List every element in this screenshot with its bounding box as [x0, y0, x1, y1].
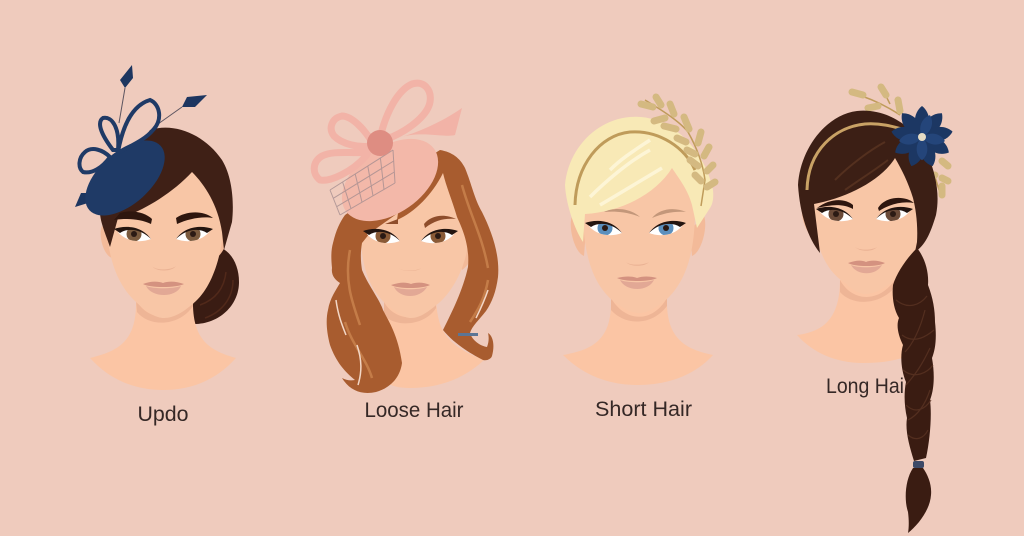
eyes loose — [363, 228, 458, 244]
lips updo — [143, 282, 184, 295]
ribbon tail loose — [398, 108, 462, 138]
hat disc loose — [327, 122, 453, 238]
brows updo — [114, 211, 213, 224]
neck and shoulders long — [797, 280, 930, 363]
label: short hair: Short Hair — [595, 398, 692, 421]
blue clip loose — [458, 333, 478, 336]
face long — [813, 147, 924, 294]
face short — [583, 160, 695, 313]
gold headband long — [807, 124, 905, 190]
neck shadow long — [840, 278, 896, 302]
ears updo — [101, 226, 227, 258]
nose updo — [152, 266, 176, 270]
hair updo — [100, 128, 233, 250]
hair highlights loose — [345, 178, 488, 378]
brows loose — [385, 216, 456, 228]
gold leaves long — [852, 86, 948, 195]
nose short — [626, 262, 649, 266]
pink fascinator loose — [314, 83, 462, 238]
figure: loose hair — [314, 83, 498, 393]
navy flower long — [890, 106, 954, 169]
loops updo — [79, 100, 159, 172]
neck and shoulders loose — [375, 300, 484, 388]
lips loose — [391, 283, 430, 296]
face loose — [361, 170, 469, 318]
figure: long hair — [797, 86, 954, 533]
hair long — [798, 111, 938, 253]
hair short — [565, 117, 713, 242]
braid strands long — [896, 296, 934, 439]
hair streaks short — [590, 140, 662, 205]
hat disc updo — [72, 127, 178, 229]
face updo — [106, 165, 224, 318]
figure: short hair — [563, 97, 715, 385]
label: long hair: Long Hai — [826, 375, 904, 398]
braid tail long — [906, 468, 931, 533]
nose loose — [399, 268, 421, 271]
eyes long — [816, 206, 913, 222]
label: updo: Updo — [138, 403, 188, 426]
lips short — [617, 276, 657, 289]
neck shadow short — [611, 298, 667, 322]
nose long — [855, 247, 877, 251]
brows short — [604, 209, 686, 218]
eyes updo — [114, 226, 213, 242]
label: loose hair: Loose Hair — [364, 399, 464, 422]
hair bun — [192, 246, 239, 324]
side braid long — [893, 248, 936, 533]
neck shadow loose — [384, 298, 436, 323]
flower inner petals long — [898, 113, 946, 160]
braid tie long — [913, 461, 924, 468]
lips long — [848, 261, 885, 273]
neck and shoulders short — [563, 300, 713, 385]
gold headband short — [575, 132, 695, 205]
ears long — [802, 203, 927, 240]
veil mesh loose — [330, 150, 395, 215]
bow knot loose — [367, 130, 393, 156]
figure: updo — [72, 65, 239, 390]
neck and shoulders updo — [90, 300, 236, 390]
neck shadow updo — [136, 296, 193, 323]
flower centre long — [918, 133, 926, 141]
laurel sprig short — [641, 97, 715, 206]
bow loops loose — [314, 83, 430, 180]
fascinator hat updo — [72, 65, 207, 229]
feathers updo — [119, 88, 182, 124]
brows long — [817, 198, 914, 211]
ears short — [571, 216, 705, 256]
hair loose — [327, 150, 498, 393]
hair sheen long — [835, 142, 888, 190]
eyes short — [585, 220, 686, 236]
ear loose — [458, 240, 471, 270]
